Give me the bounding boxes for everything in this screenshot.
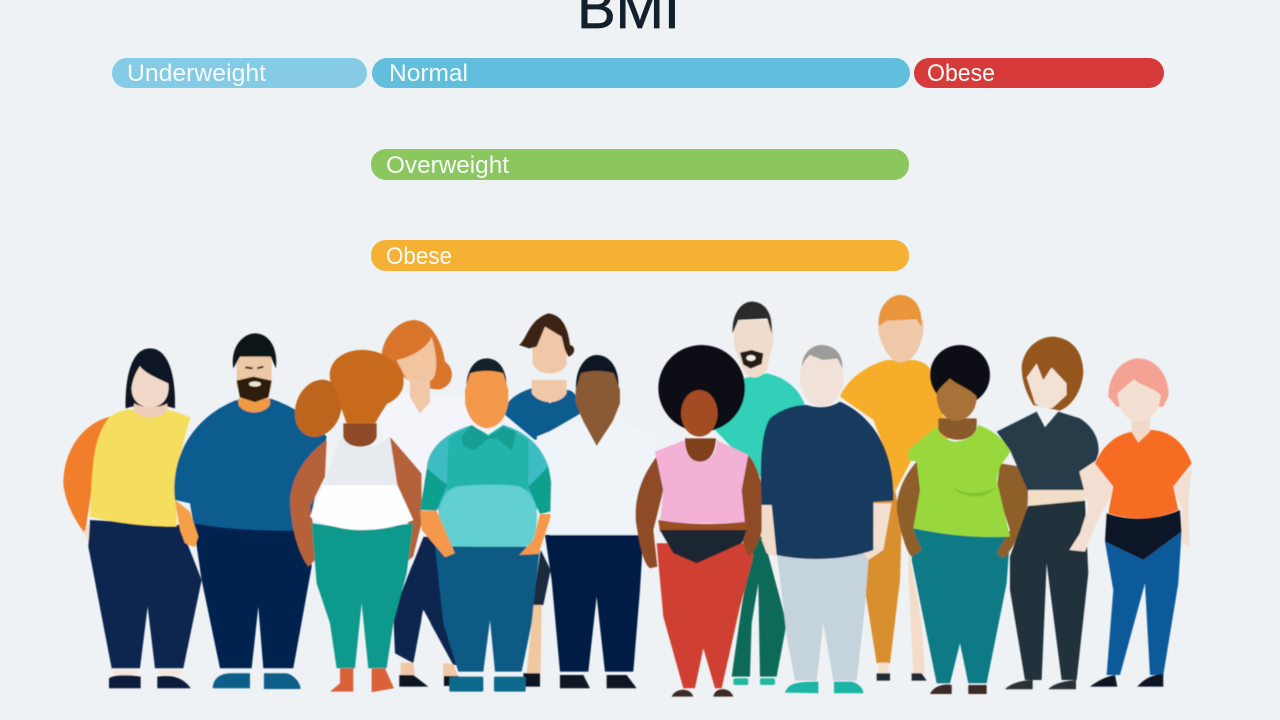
person: man in blue shirt with fringe, back row <box>503 313 581 687</box>
person: woman in white blouse, back row <box>377 320 480 687</box>
bar: normal: Normal <box>389 60 468 87</box>
bar: overweight: Overweight <box>386 152 509 179</box>
bar: obese red <box>914 58 1164 88</box>
bar: obese orange: Obese <box>386 243 452 270</box>
person: woman with short afro in green top and teal trousers <box>897 345 1028 694</box>
bar: obese orange <box>371 240 909 271</box>
person: older man in navy sweater and grey trousers <box>761 345 893 693</box>
person: bearded man in blue shirt <box>174 333 327 689</box>
person: person in dark top and dark trousers <box>997 337 1099 689</box>
person: man in white shirt and navy trousers <box>537 355 657 688</box>
bar: normal <box>372 58 910 88</box>
bar: underweight: Underweight <box>127 60 266 87</box>
person: woman in yellow top and navy trousers <box>63 348 202 688</box>
person: woman in white tank top and teal trousers <box>287 343 422 692</box>
person: woman in orange top and blue jeans <box>1069 358 1192 687</box>
person: man in teal polo shirt <box>420 358 557 692</box>
bar: overweight <box>371 149 909 180</box>
bar: obese red: Obese <box>927 60 995 87</box>
person: woman with afro in pink top and red trousers <box>636 345 764 697</box>
category bars <box>112 58 1164 271</box>
person: bearded man in teal shirt, back row <box>715 302 805 685</box>
group of people <box>63 295 1192 697</box>
person: man in yellow-orange shirt, back row <box>840 295 977 681</box>
bar: underweight <box>112 58 367 88</box>
